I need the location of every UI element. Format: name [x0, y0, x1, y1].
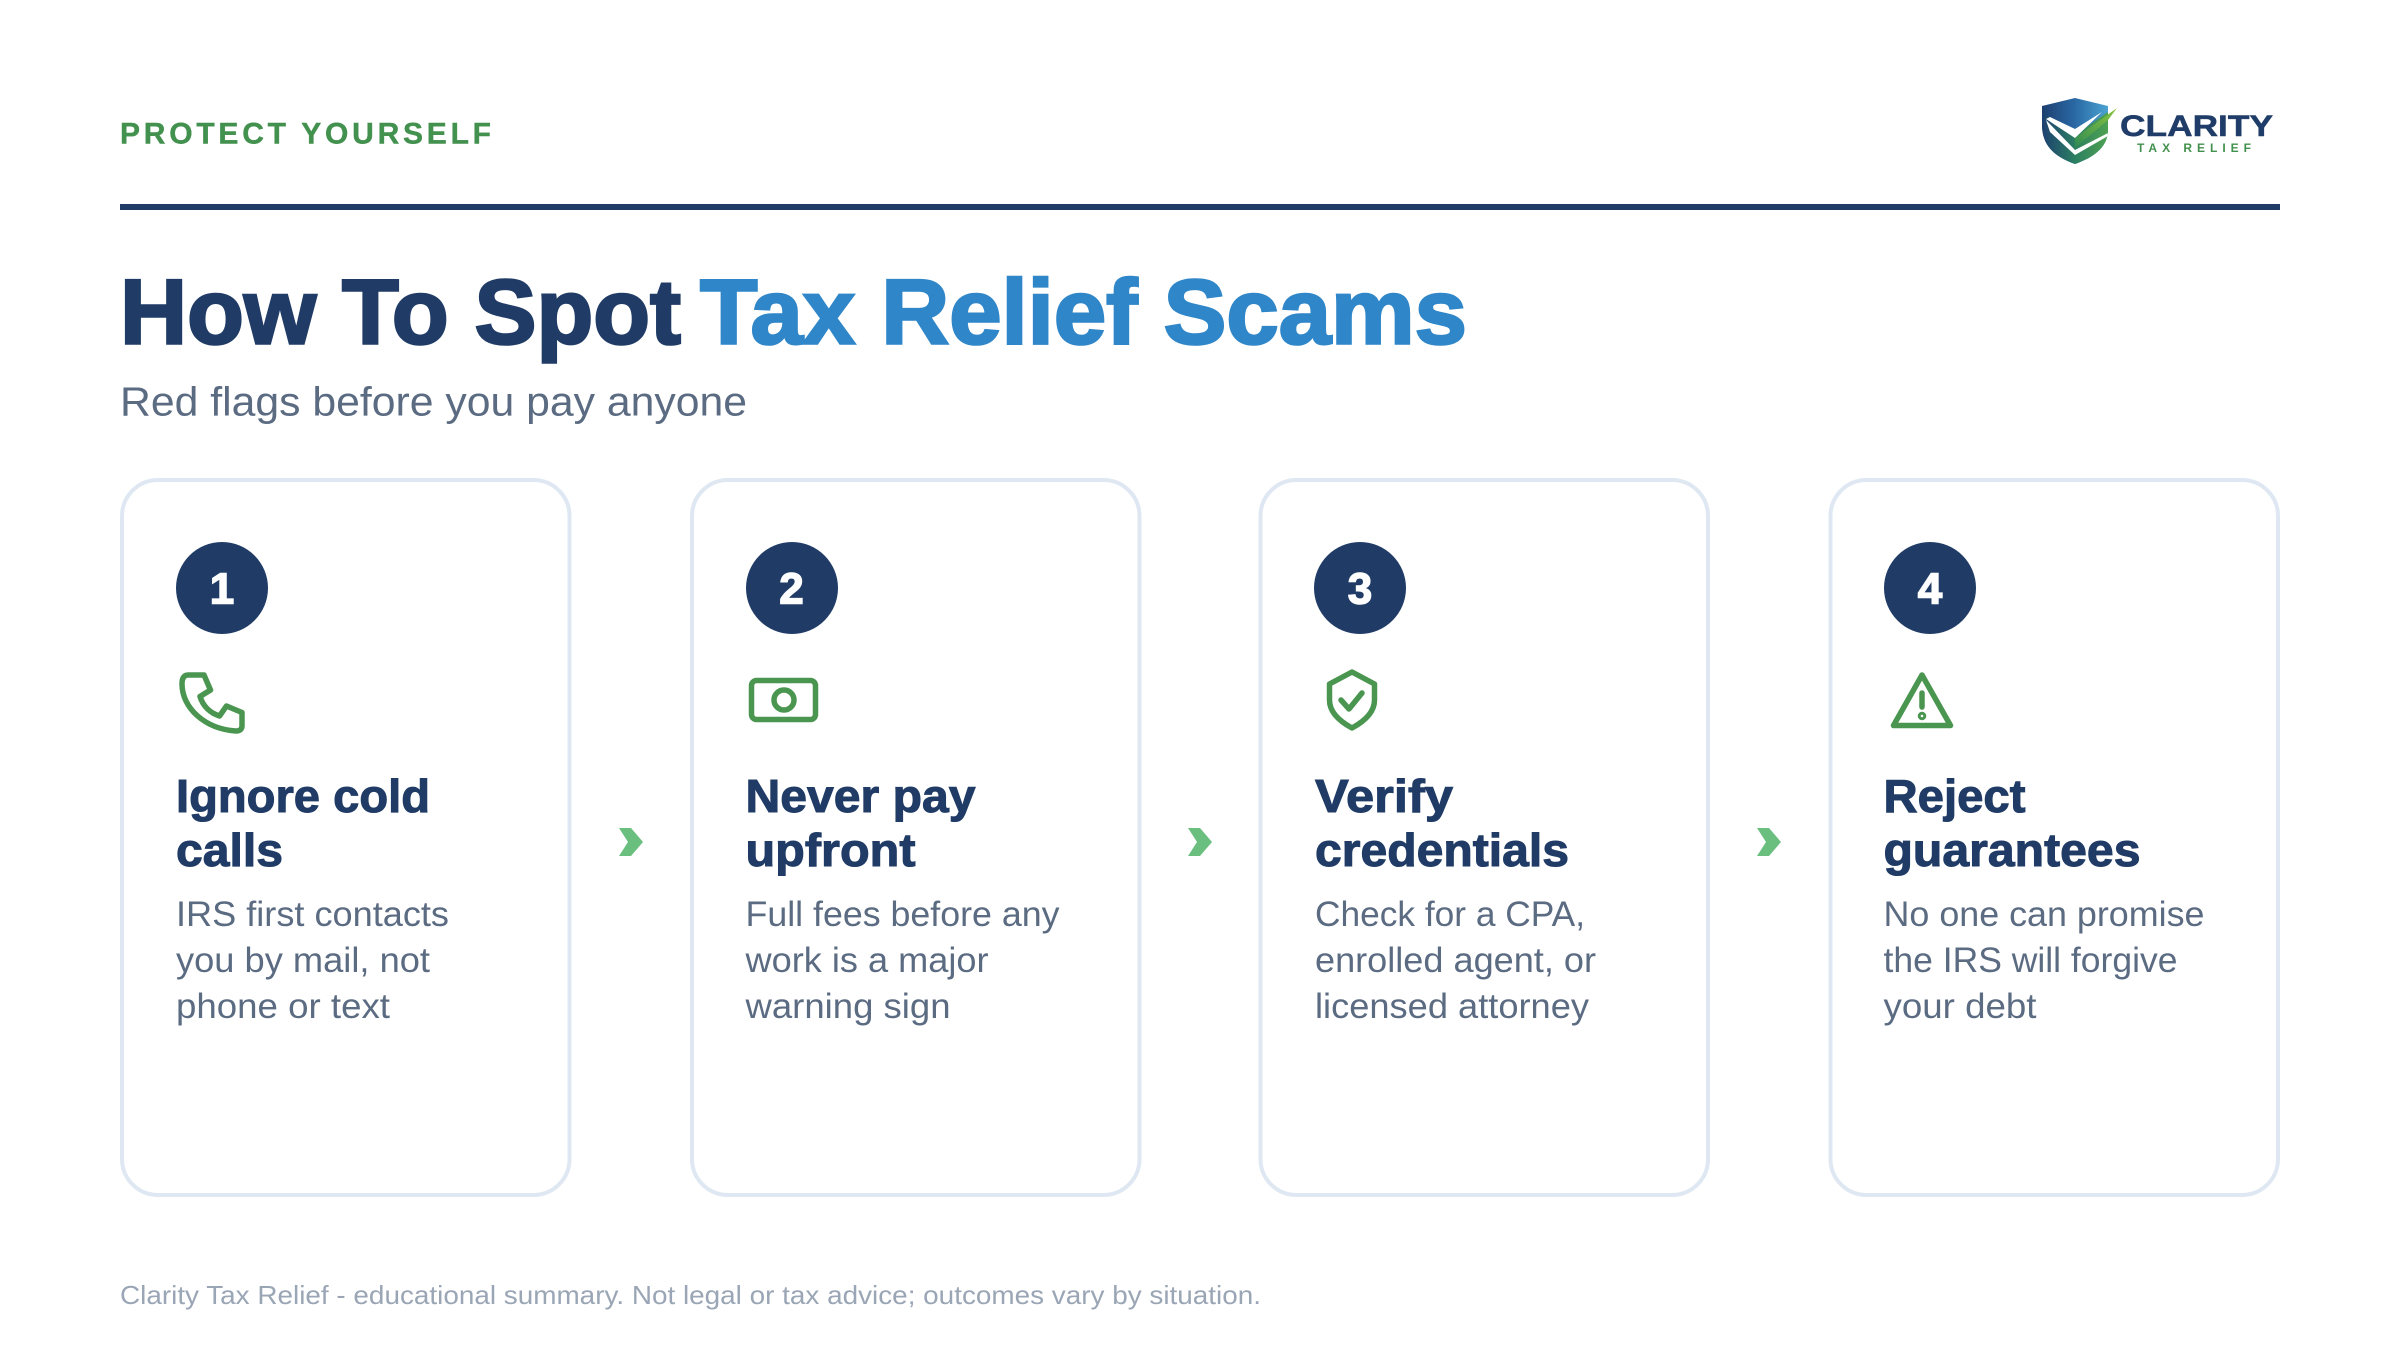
step badge 2 — [746, 542, 838, 634]
heading 3 — [1315, 770, 1569, 876]
panel: step 3 — [1260, 480, 1708, 1195]
heading 4: guarantees — [1884, 824, 2140, 876]
icon: phone — [182, 675, 242, 731]
subtitle: Red flags before you pay anyone — [120, 378, 747, 424]
logo — [2042, 98, 2273, 166]
heading 3: credentials — [1315, 824, 1569, 876]
icon: banknote — [752, 680, 816, 720]
panel: step 1 — [122, 480, 570, 1195]
step badge 2: 2 — [779, 564, 804, 614]
arrow 2 — [1188, 828, 1212, 856]
body 2: warning sign — [744, 987, 950, 1026]
eyebrow: PROTECT YOURSELF — [120, 118, 491, 150]
step badge 3 — [1314, 542, 1406, 634]
body 1 — [176, 895, 449, 1026]
logo shield — [2042, 98, 2117, 166]
footer disclaimer: Clarity Tax Relief - educational summary. Not legal or tax advice; outcomes vary by situation. — [120, 1280, 1261, 1310]
body 3: enrolled agent, or — [1315, 941, 1596, 980]
heading 1: calls — [176, 824, 283, 876]
body 4: the IRS will forgive — [1884, 941, 2178, 980]
step badge 1: 1 — [210, 564, 234, 614]
heading 2: Never pay — [746, 770, 976, 822]
heading 4: Reject — [1884, 770, 2026, 822]
body 2 — [744, 895, 1060, 1026]
logo tagline: TAX RELIEF — [2137, 141, 2251, 155]
icon: shield check — [1330, 672, 1374, 728]
heading 1: Ignore cold — [176, 770, 430, 822]
icon: warning triangle — [1894, 675, 1950, 726]
heading 1 — [176, 770, 430, 876]
body 3: Check for a CPA, — [1315, 895, 1585, 934]
arrow 3 — [1757, 828, 1781, 856]
panel: step 2 — [692, 480, 1140, 1195]
heading 3: Verify — [1315, 770, 1453, 822]
header rule — [120, 204, 2280, 210]
body 1: phone or text — [176, 987, 390, 1026]
body 4: No one can promise — [1884, 895, 2204, 934]
body 3 — [1315, 895, 1596, 1026]
heading 2: upfront — [746, 824, 916, 876]
body 4 — [1884, 895, 2204, 1026]
step badge 4: 4 — [1918, 564, 1943, 614]
step badge 1 — [176, 542, 268, 634]
heading 2 — [746, 770, 976, 876]
body 2: Full fees before any — [746, 895, 1060, 934]
title navy part: How To Spot — [120, 262, 681, 364]
title — [120, 262, 1467, 364]
step badge 4 — [1884, 542, 1976, 634]
logo wordmark: CLARITY — [2120, 110, 2273, 143]
heading 4 — [1884, 770, 2140, 876]
body 1: IRS first contacts — [176, 895, 449, 934]
body 4: your debt — [1884, 987, 2037, 1026]
arrow 1 — [619, 828, 643, 856]
body 2: work is a major — [744, 941, 989, 980]
title blue part: Tax Relief Scams — [700, 262, 1467, 364]
step badge 3: 3 — [1348, 564, 1372, 614]
body 1: you by mail, not — [176, 941, 430, 980]
panel: step 4 — [1830, 480, 2278, 1195]
body 3: licensed attorney — [1315, 987, 1590, 1026]
